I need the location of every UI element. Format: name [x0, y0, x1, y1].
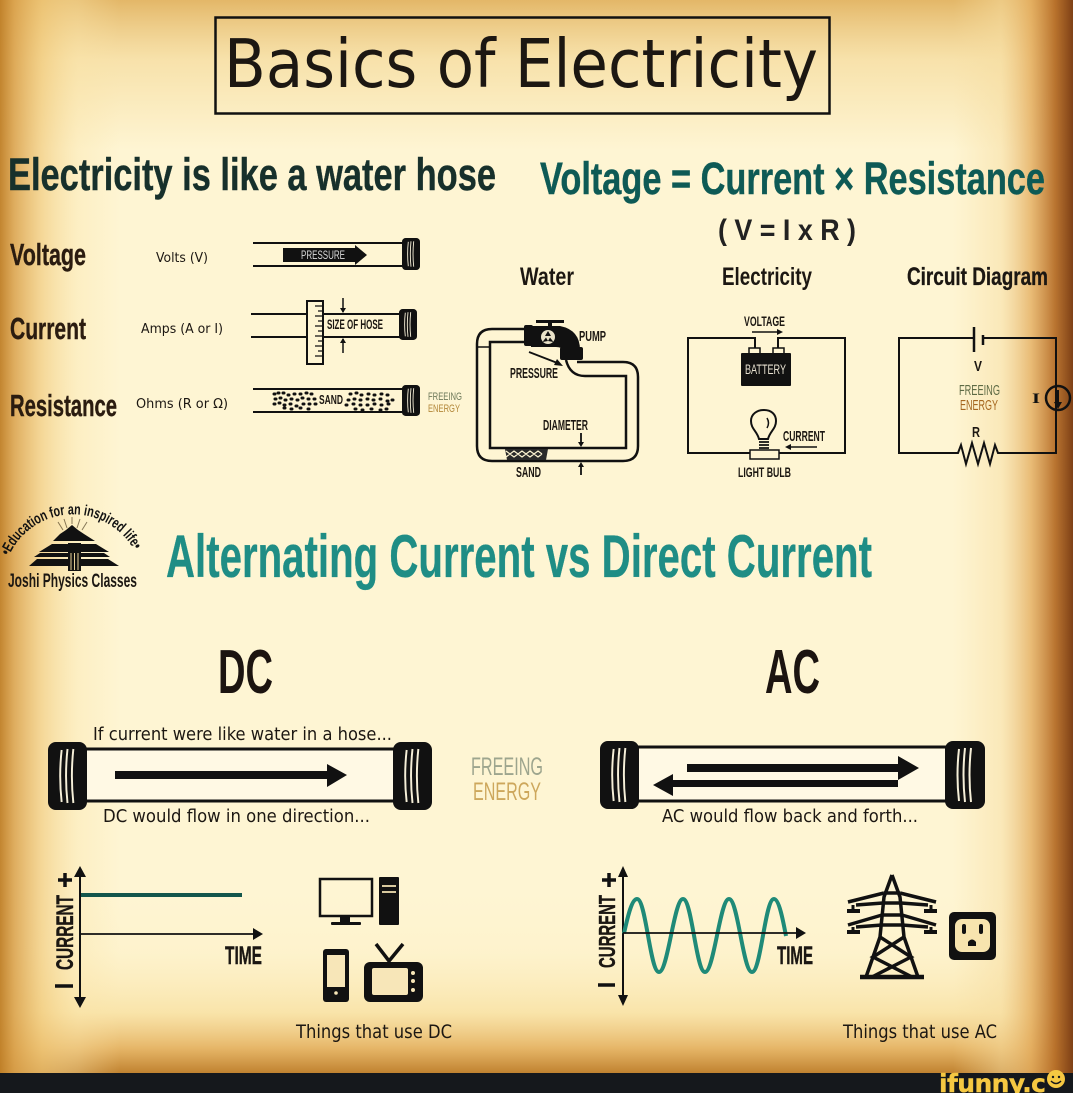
diagram: electric circuit: CURRENT: [783, 428, 825, 445]
row: current: Current: [10, 311, 86, 346]
diagram: circuit schematic: [899, 327, 1070, 464]
DC hose: If current were like water in a hose...: [93, 724, 392, 745]
caption: things that use DC: Things that use DC: [295, 1021, 452, 1043]
logo: Joshi Physics Classes: Joshi Physics Classes: [8, 571, 137, 592]
watermark: small freeing energy: [428, 391, 462, 415]
chart: DC current over time: [52, 866, 263, 1008]
row: resistance: Ohms (R or Ω): [136, 396, 228, 412]
diagram: circuit schematic: V: [974, 358, 982, 375]
icon: open book and tree: [29, 517, 119, 571]
chart: AC current over time: [594, 866, 813, 1006]
diagram: electric circuit: LIGHT BULB: [738, 464, 791, 480]
AC hose: AC would flow back and forth...: [662, 806, 918, 827]
DC hose: [48, 724, 432, 827]
icon: power outlet: [949, 912, 996, 960]
diagram: water loop: SAND: [516, 464, 541, 481]
DC hose: DC would flow in one direction...: [103, 806, 370, 827]
watermark: freeing energy: ENERGY: [473, 778, 541, 806]
heading: DC: DC: [218, 638, 273, 707]
watermark: small freeing energy: FREEING: [428, 391, 462, 403]
diagram: circuit schematic: ENERGY: [960, 397, 998, 414]
icon: computer: [320, 877, 399, 925]
icon: television: [364, 944, 423, 1002]
row: current: Amps (A or I): [141, 321, 223, 337]
icon: battery: BATTERY: [745, 361, 786, 377]
icon: current source: [1046, 386, 1070, 410]
diagram: circuit schematic: FREEING: [959, 382, 1000, 399]
watermark: freeing energy: [471, 753, 543, 806]
icon: light bulb: [750, 410, 779, 459]
diagram: electric circuit: VOLTAGE: [744, 313, 785, 329]
icon: phone: [323, 949, 349, 1002]
row: voltage: PRESSURE: [301, 248, 345, 262]
diagram: electric circuit: [688, 313, 845, 480]
watermark: freeing energy: FREEING: [471, 753, 543, 781]
chart: DC current over time: TIME: [225, 942, 262, 970]
heading: Ohm's law: ( V = I x R ): [718, 214, 856, 247]
diagram: water loop: DIAMETER: [543, 417, 588, 434]
icon: pump: [524, 320, 583, 360]
icon: battery: [741, 348, 791, 386]
heading: Ohm's law: [540, 153, 1045, 247]
row: current: SIZE OF HOSE: [327, 316, 383, 332]
logo: Joshi Physics Classes: [2, 504, 140, 592]
diagram: water loop: PRESSURE: [510, 365, 558, 382]
chart: AC current over time: TIME: [777, 942, 813, 970]
chart: DC current over time: CURRENT: [52, 895, 79, 970]
row: voltage: Volts (V): [156, 251, 208, 266]
AC hose: [600, 741, 985, 827]
row: voltage: Voltage: [10, 237, 86, 272]
column headings: [520, 263, 1048, 291]
column headings: Electricity: [722, 263, 812, 291]
icon: transmission tower: [847, 875, 937, 977]
title box: Basics of Electricity: [224, 25, 818, 103]
row: current: [10, 298, 417, 364]
diagram: water loop: PUMP: [579, 328, 606, 345]
diagram: circuit schematic: R: [972, 424, 980, 441]
heading: AC: AC: [765, 638, 820, 707]
heading: water hose analogy: Electricity is like a water hose: [8, 149, 496, 200]
row: resistance: [10, 385, 420, 423]
row: voltage: [10, 237, 420, 272]
row: resistance: SAND: [319, 392, 343, 407]
row: resistance: Resistance: [10, 388, 117, 423]
diagram: circuit schematic: I: [1032, 391, 1040, 407]
logo: Joshi Physics Classes: •Education for an inspired life•: [2, 504, 140, 554]
watermark: small freeing energy: ENERGY: [428, 403, 460, 415]
icons: DC devices: [320, 877, 423, 1002]
chart: AC current over time: CURRENT: [594, 895, 620, 968]
diagram: water loop: [477, 320, 638, 481]
column headings: Water: [520, 263, 574, 291]
footer bar: [0, 1069, 1073, 1093]
caption: things that use AC: Things that use AC: [842, 1021, 997, 1043]
